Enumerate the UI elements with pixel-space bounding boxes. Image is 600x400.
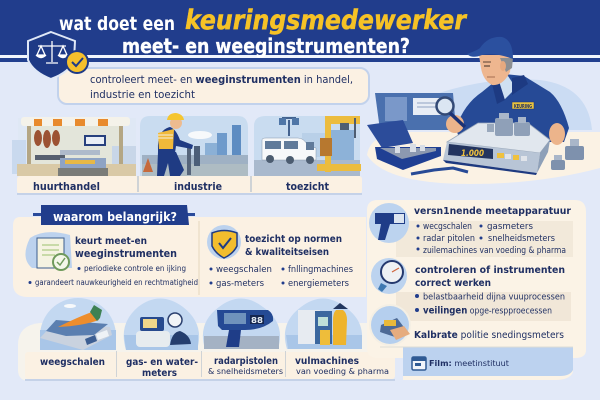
inspector body: KEURING — [514, 104, 532, 110]
screwdriver — [411, 168, 468, 174]
text: oversight: energiemeters — [288, 279, 349, 289]
panel: industry photo — [140, 113, 248, 176]
label strip: sectors: toezicht — [286, 181, 329, 193]
label: gas and water meters: meters — [142, 368, 177, 379]
text: oversight — [210, 234, 353, 289]
icon: calibration circle — [369, 304, 411, 346]
text: oversight: fnllingmachines — [288, 265, 353, 275]
title — [59, 5, 467, 58]
digital scale — [443, 123, 550, 175]
text: check instruments: belastbaarheid dijna vuuprocessen — [423, 292, 565, 302]
label: gas and water meters — [126, 357, 198, 379]
text: film source: Film: meetinstituut — [429, 359, 509, 368]
text: check instruments: controleren of instrumenten — [415, 265, 565, 276]
text: oversight: weegschalen — [216, 265, 272, 275]
icon: filling machine — [285, 298, 362, 349]
text: inspects instruments: keurt meet-en — [75, 236, 147, 247]
text: check instruments — [415, 265, 565, 316]
icon: film card — [412, 357, 426, 370]
text: inspects instruments: garandeert nauwkeurigheid en rechtmatigheid — [35, 278, 198, 287]
label: radar guns — [208, 356, 283, 376]
intro callout — [58, 68, 369, 104]
magnifier — [436, 98, 465, 127]
label: filling machines: van voeding & pharma — [296, 367, 389, 376]
label strip: sectors — [17, 176, 362, 195]
text: calibrate: Kalbrate politie snedingsmeters — [414, 330, 564, 341]
label: filling machines — [295, 356, 389, 376]
panel: instrument types — [18, 298, 395, 381]
text: inspects instruments: weeginstrumenten — [75, 248, 177, 260]
text: various devices: gasmeters — [487, 222, 534, 232]
icon: gauge circle — [371, 258, 407, 294]
open weights case — [367, 120, 441, 170]
label: radar guns: radarpistolen — [214, 356, 278, 367]
illustration: inspector at scale — [367, 37, 600, 184]
text: inspects instruments — [28, 236, 198, 287]
laptop — [375, 93, 456, 130]
text: various devices — [414, 206, 571, 256]
icon: radar gun — [203, 298, 280, 349]
label strip: sectors: industrie — [174, 181, 222, 193]
icon: quality shield — [207, 225, 241, 259]
intro callout: controleert meet- en weeginstrumenten in handel, — [90, 74, 353, 86]
label: scales: weegschalen — [40, 357, 105, 368]
ribbon heading — [33, 205, 195, 225]
icon: gas and water meters — [124, 298, 199, 350]
text: oversight: toezicht op normen — [245, 234, 342, 245]
panel: why it matters — [13, 205, 366, 297]
text: various devices: wecgschalen — [423, 222, 472, 232]
panel: retail photo — [12, 117, 136, 176]
text: various devices: zuilemachines van voeding & pharma — [423, 246, 566, 256]
icon: checklist — [25, 232, 72, 270]
text: various devices: versn1nende meetapparatuur — [414, 206, 571, 217]
text: various devices: snelheidsmeters — [488, 234, 556, 244]
icon: shield with scales — [28, 32, 89, 79]
text: oversight: gas-meters — [216, 279, 264, 289]
inspector body — [446, 74, 569, 145]
ribbon heading: waarom belangrijk? — [53, 210, 177, 224]
inspector head — [467, 37, 513, 85]
calibration weights — [487, 113, 584, 170]
title: wat doet een — [59, 13, 175, 35]
text: various devices: radar pitolen — [423, 234, 475, 244]
text: check instruments: veilingen opge-respproecessen — [423, 306, 552, 316]
text: check instruments: correct werken — [415, 278, 491, 289]
label strip: sectors: huurthandel — [33, 181, 100, 193]
icon: radar gun circle — [369, 203, 409, 243]
icon: kitchen scale with carrot — [40, 298, 116, 350]
text: oversight: & kwaliteitseisen — [245, 247, 329, 258]
label: radar guns: & snelheidsmeters — [208, 367, 283, 376]
label: gas and water meters: gas- en water- — [126, 357, 198, 368]
title: meet- en weeginstrumenten? — [122, 34, 410, 58]
intro callout: industrie en toezicht — [90, 89, 195, 101]
panel: oversight photo — [254, 116, 361, 176]
text: inspects instruments: periodieke controle en ijking — [84, 264, 186, 273]
icon: radar gun: 88 — [251, 316, 263, 325]
panel: measuring devices and calibration — [367, 200, 586, 380]
digital scale: 1.000 — [461, 149, 484, 159]
label: filling machines: vulmachines — [295, 356, 359, 367]
title: keuringsmedewerker — [185, 5, 467, 36]
header banner — [0, 0, 600, 62]
